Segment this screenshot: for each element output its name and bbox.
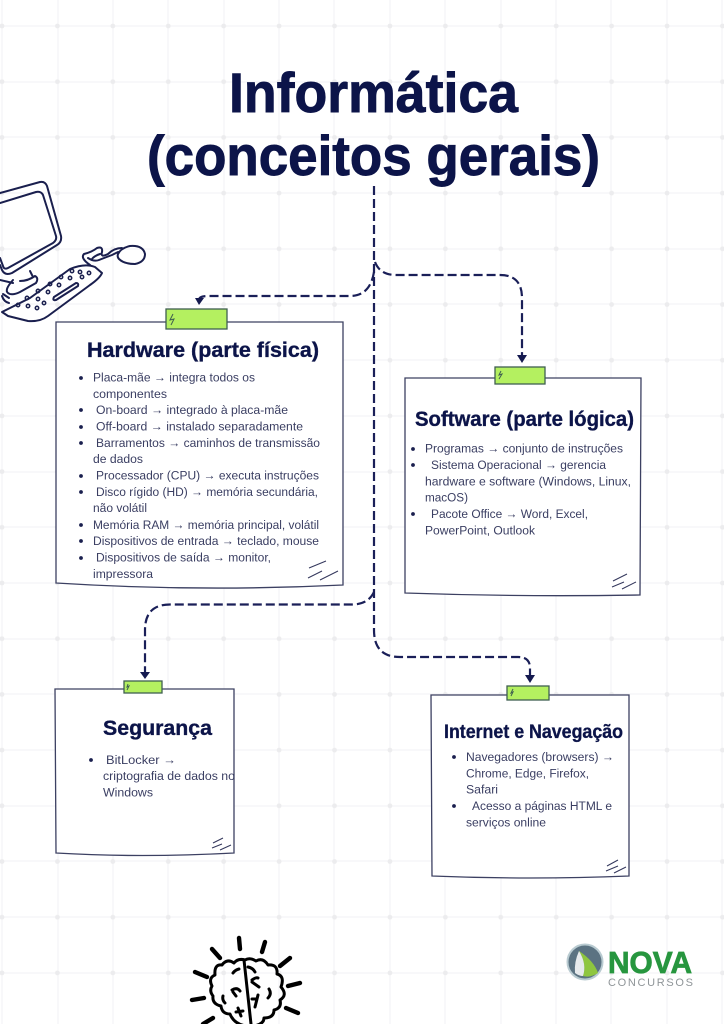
list: hardware: On-board → integrado à placa-mãe: [96, 403, 288, 417]
logo wordmark: NOVA: [608, 945, 692, 980]
connector: trunk to seguranca: [145, 592, 374, 672]
title: [147, 61, 600, 187]
list: software: macOS): [425, 490, 468, 504]
list: seguranca: [89, 753, 235, 800]
tab: internet: [507, 686, 549, 700]
hatch: internet: [606, 860, 626, 873]
list: hardware: Placa-mãe → integra todos os: [93, 370, 255, 384]
list: software: PowerPoint, Outlook: [425, 524, 536, 538]
title: (conceitos gerais): [147, 124, 600, 187]
list: hardware: de dados: [93, 452, 143, 466]
panel: software: [405, 367, 641, 596]
list: software: hardware e software (Windows, Linux,: [425, 474, 631, 488]
list: software: [411, 442, 631, 538]
heading: seguranca: Segurança: [103, 717, 212, 740]
list: hardware: não volátil: [93, 501, 147, 515]
panel: hardware: [56, 309, 343, 588]
arrow: seguranca: [140, 672, 150, 679]
list: hardware: Dispositivos de entrada → teclado, mouse: [93, 534, 319, 548]
list: software: Pacote Office → Word, Excel,: [431, 507, 588, 521]
panel: internet: [431, 686, 629, 878]
list: hardware: Processador (CPU) → executa instruções: [96, 468, 319, 482]
list: hardware: Barramentos → caminhos de transmissão: [96, 436, 320, 450]
tab: hardware: [166, 309, 227, 329]
logo: Nova Concursos: [568, 944, 693, 989]
tab: software: [495, 367, 545, 384]
logo emblem: [568, 944, 602, 980]
hatch: seguranca: [212, 838, 231, 850]
heading: software: Software (parte lógica): [415, 408, 634, 431]
list: hardware: impressora: [93, 567, 153, 581]
arrow: internet: [525, 675, 535, 683]
list: hardware: Dispositivos de saída → monitor,: [96, 550, 271, 564]
list: hardware: Memória RAM → memória principal, volátil: [93, 518, 319, 532]
list: software: Programas → conjunto de instruções: [425, 442, 623, 456]
list: seguranca: Windows: [103, 786, 153, 800]
arrow: software: [517, 355, 527, 363]
arrow: hardware: [195, 298, 204, 305]
connector: trunk to internet: [374, 186, 530, 676]
list: internet: Acesso a páginas HTML e: [472, 799, 612, 813]
list: hardware: componentes: [93, 387, 167, 401]
heading: internet: Internet e Navegação: [444, 721, 623, 743]
list: internet: Navegadores (browsers) →: [466, 750, 614, 764]
hatch: software: [612, 574, 636, 589]
list: internet: serviços online: [466, 816, 546, 830]
list: hardware: [79, 370, 320, 581]
logo subtitle: CONCURSOS: [608, 977, 693, 989]
list: software: Sistema Operacional → gerencia: [431, 458, 606, 472]
icon: desktop computer: [0, 182, 145, 321]
list: hardware: Off-board → instalado separadamente: [96, 420, 303, 434]
connector: trunk to software: [375, 262, 522, 356]
hatch: hardware: [308, 561, 338, 580]
list: internet: Safari: [466, 782, 498, 796]
list: seguranca: BitLocker →: [106, 753, 176, 767]
icon: brain with rays: [192, 938, 300, 1024]
list: hardware: Disco rígido (HD) → memória secundária,: [96, 485, 318, 499]
panel: seguranca: [55, 681, 235, 856]
list: internet: [452, 750, 614, 830]
list: seguranca: criptografia de dados no: [103, 769, 235, 783]
title: Informática: [229, 61, 519, 124]
list: internet: Chrome, Edge, Firefox,: [466, 766, 589, 780]
tab: seguranca: [124, 681, 162, 693]
connector: trunk to hardware: [199, 272, 374, 300]
heading: hardware: Hardware (parte física): [87, 339, 319, 362]
